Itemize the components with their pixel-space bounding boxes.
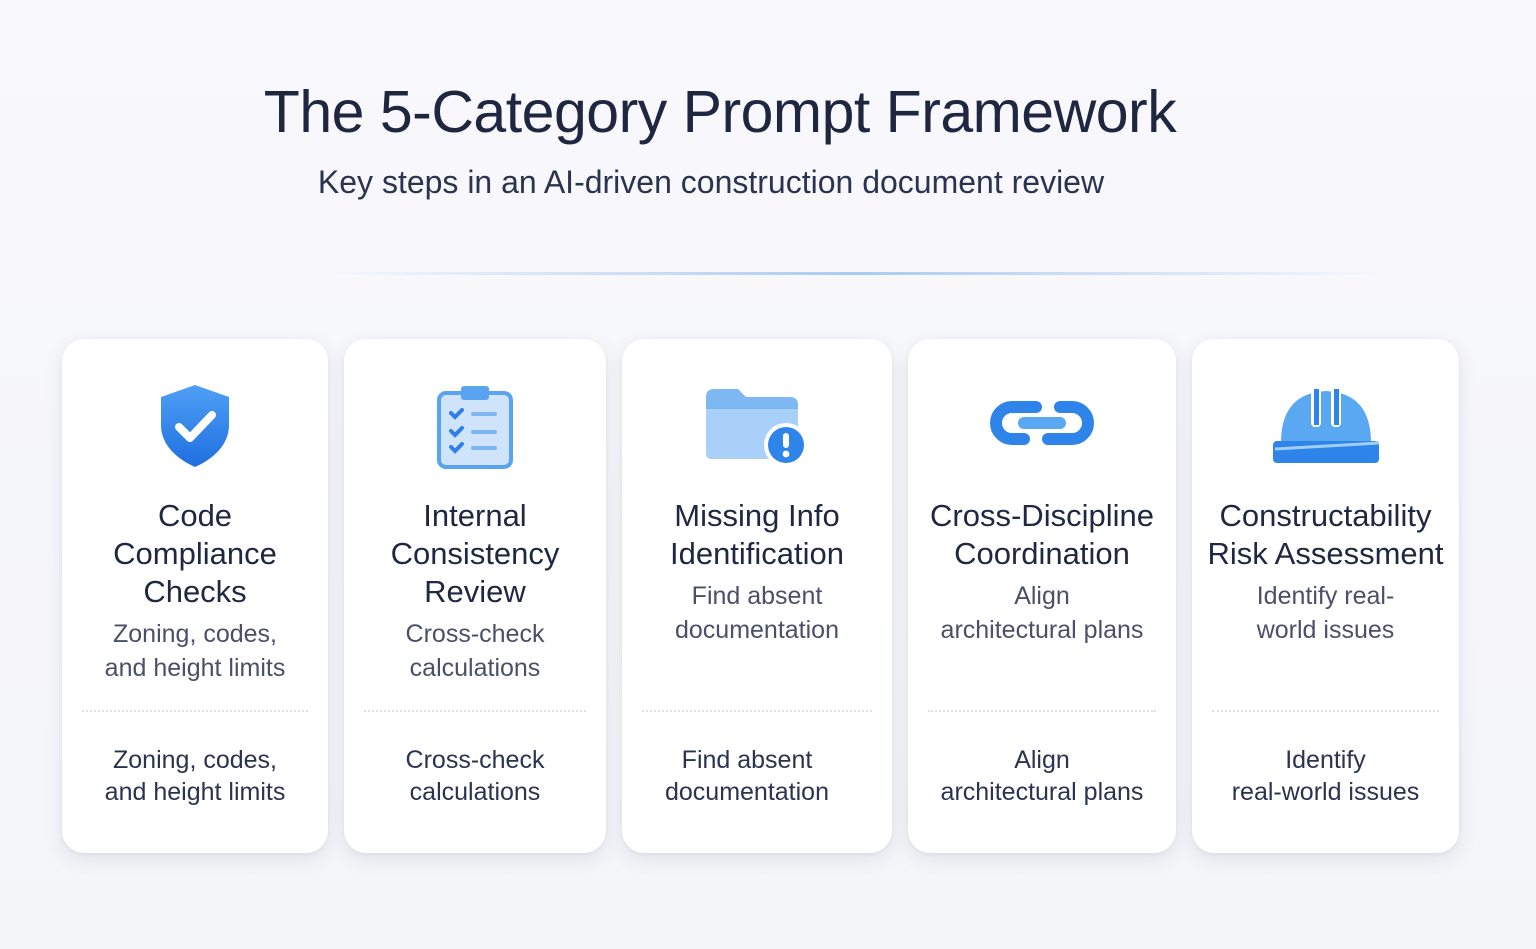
icon: hard hat [1273,389,1380,463]
bottom text [941,746,1143,806]
title: The 5-Category Prompt Framework [264,79,1176,145]
heading: Constructability [1220,498,1431,533]
heading: Align [1014,582,1070,610]
heading: Risk Assessment [1207,536,1444,571]
heading: calculations [410,654,540,682]
decorative streak [320,272,1390,275]
icon: chain link [990,401,1094,445]
bottom text: documentation [665,778,829,806]
heading: world issues [1257,616,1394,644]
heading: Code [158,498,232,533]
heading [670,498,844,644]
icon: folder alert [706,389,804,463]
bottom text: Identify [1285,746,1366,774]
bottom text: real-world issues [1232,778,1419,806]
heading: Coordination [954,536,1130,571]
heading: Zoning, codes, [113,620,277,648]
bottom text: calculations [410,778,540,806]
bottom text [406,746,544,806]
bottom text: architectural plans [941,778,1143,806]
heading: Missing Info [674,498,840,533]
bottom text [1232,746,1419,806]
heading: architectural plans [941,616,1143,644]
heading: Identify real- [1257,582,1394,610]
heading: documentation [675,616,839,644]
heading: Cross-check [406,620,544,648]
heading: Find absent [692,582,822,610]
bottom text: Align [1014,746,1070,774]
bottom text: and height limits [105,778,285,806]
card 3: missing info [622,339,892,853]
bottom text: Cross-check [406,746,544,774]
bottom text: Find absent [682,746,812,774]
heading: Internal [423,498,527,533]
icon: shield [161,385,229,467]
card 2: internal consistency [344,339,606,853]
bottom text [665,746,829,806]
heading [391,498,560,682]
bottom text: Zoning, codes, [113,746,277,774]
heading: Cross-Discipline [930,498,1154,533]
heading [930,498,1154,644]
card 5: constructability [1192,339,1459,853]
card 1: code compliance [62,339,328,853]
icon: clipboard [437,386,513,469]
heading: Compliance [113,536,277,571]
heading: and height limits [105,654,285,682]
bottom text [105,746,285,806]
card 4: cross-discipline [908,339,1176,853]
heading: Consistency [391,536,559,571]
subtitle: Key steps in an AI-driven construction document review [318,164,1104,200]
heading [105,498,285,682]
heading: Review [424,574,526,609]
heading: Checks [143,574,247,609]
heading [1207,498,1444,644]
heading: Identification [670,536,844,571]
